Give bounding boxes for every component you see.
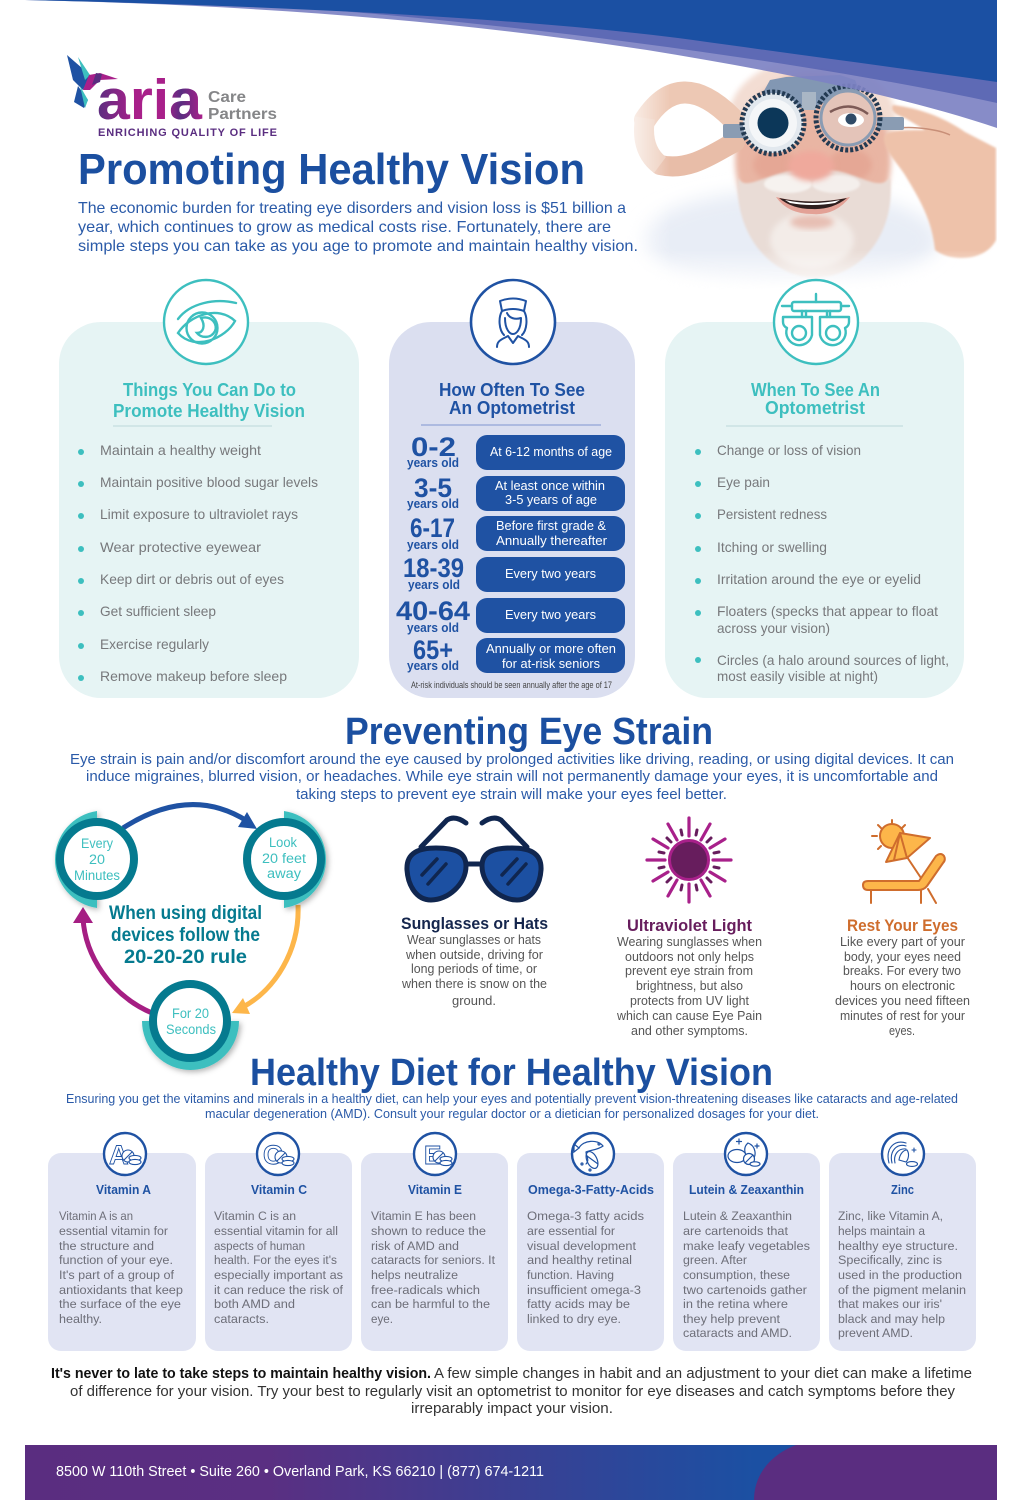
card: lutein and zeaxanthin <box>673 1133 820 1351</box>
bullet list: Circles (a halo around sources of light, <box>717 652 949 668</box>
card: vitamin A: Vitamin A <box>96 1183 151 1197</box>
bullet list: Exercise regularly <box>100 636 209 652</box>
card: omega-3: Omega-3-Fatty-Acids <box>528 1183 654 1197</box>
blue header swoosh <box>25 0 997 128</box>
body text: essential vitamin for all <box>214 1224 338 1238</box>
body text: Lutein & Zeaxanthin <box>683 1209 792 1223</box>
heading: preventing eye strain: Preventing Eye Strain <box>345 711 713 753</box>
icon: fish and capsule <box>572 1133 614 1175</box>
eye strain paragraph: induce migraines, blurred vision, or headaches. While eye strain will not permanently damage your eyes, it is uncomfortable and <box>86 769 938 785</box>
tip: ultraviolet light: which can cause Eye Pain <box>616 1009 762 1023</box>
rule text: devices follow the <box>111 925 260 946</box>
row: 3-5: 3-5 <box>414 473 452 503</box>
row: 18-39: Every two years <box>505 566 596 581</box>
tip: rest your eyes: devices you need fifteen <box>835 994 970 1008</box>
card: vitamin C: Vitamin C <box>251 1183 307 1197</box>
body text: fatty acids may be <box>527 1297 630 1311</box>
icon: lounge chair and umbrella <box>863 820 945 903</box>
bullet list: Persistent redness <box>717 506 827 522</box>
logo: Aria Care Partners: ENRICHING QUALITY OF LIFE <box>98 127 277 139</box>
tip: ultraviolet light: brightness, but also <box>636 979 743 993</box>
bullet list: Get sufficient sleep <box>100 603 216 619</box>
bullet list: Eye pain <box>717 474 770 490</box>
intro paragraph: year, which continues to grow as medical costs rise. Fortunately, there are <box>78 219 611 236</box>
tip: sunglasses or hats: Wear sunglasses or hats <box>407 933 541 947</box>
panel: things you can do <box>59 280 359 698</box>
body text: make leafy vegetables <box>683 1239 810 1253</box>
body text <box>527 1209 644 1326</box>
tip: rest your eyes: minutes of rest for your <box>840 1009 965 1023</box>
bullet list: Wear protective eyewear <box>100 539 261 555</box>
icon: vitamin C <box>257 1133 299 1175</box>
body text: Vitamin A is an <box>59 1209 133 1223</box>
body text: cataracts. <box>214 1312 269 1326</box>
icon: vitamin E <box>414 1133 456 1175</box>
diagram: 20-20-20 rule <box>55 805 326 1070</box>
body text <box>683 1209 810 1340</box>
tip: ultraviolet light: protects from UV light <box>630 994 750 1008</box>
row: 3-5: At least once within <box>495 478 605 493</box>
tip: ultraviolet light: prevent eye strain from <box>625 964 753 978</box>
bullet list: across your vision) <box>717 620 830 636</box>
tip: sunglasses or hats: when there is snow on the <box>401 977 547 991</box>
body text: aspects of human <box>214 1239 305 1253</box>
body text: risk of AMD and <box>371 1239 459 1253</box>
icon: sunglasses <box>407 818 541 900</box>
tip: rest your eyes: Rest Your Eyes <box>847 916 958 935</box>
body text: cataracts for seniors. It <box>371 1253 496 1267</box>
heading: An Optometrist <box>449 398 575 418</box>
body text: Vitamin E has been <box>371 1209 476 1223</box>
panel: how often to see an optometrist <box>389 280 635 698</box>
body text: It's part of a group of <box>59 1268 175 1282</box>
row: 0-2: years old <box>407 456 459 470</box>
body text: used in the production <box>838 1268 962 1282</box>
heading <box>751 380 880 418</box>
card: omega-3 <box>517 1133 664 1351</box>
icon: oyster and capsule <box>882 1133 924 1175</box>
body text: function of your eye. <box>59 1253 173 1267</box>
arrow: purple <box>73 907 152 1013</box>
body text: Zinc, like Vitamin A, <box>838 1209 943 1223</box>
body text: health. For the eyes it's <box>214 1253 337 1267</box>
row: 40-64: 40-64 <box>396 596 470 626</box>
intro paragraph <box>78 200 638 255</box>
rule text: When using digital <box>109 903 262 924</box>
heading <box>439 380 585 418</box>
bullet list: Maintain a healthy weight <box>100 442 261 458</box>
icon: optometrist <box>471 280 555 364</box>
row: 65+: years old <box>407 659 459 673</box>
eye strain paragraph <box>70 752 954 803</box>
row: 3-5: 3-5 years of age <box>505 492 597 507</box>
diet paragraph: macular degeneration (AMD). Consult your regular doctor or a dietician for personalized dosages for your diet. <box>205 1106 819 1121</box>
tip: sunglasses or hats: Sunglasses or Hats <box>401 914 548 933</box>
body text: green. After <box>683 1253 747 1267</box>
step: every 20 minutes: Every <box>81 836 113 851</box>
body text: they help prevent <box>683 1312 781 1326</box>
body text: healthy. <box>59 1312 102 1326</box>
body text <box>371 1209 496 1326</box>
closing statement: It's never to late to take steps to maintain healthy vision. <box>51 1366 431 1382</box>
bullet list: most easily visible at night) <box>717 668 878 684</box>
heading: Things You Can Do to <box>123 380 296 400</box>
row: 40-64 <box>396 596 625 635</box>
bullet list <box>78 442 318 684</box>
body text: prevent AMD. <box>838 1326 913 1340</box>
card: vitamin C <box>205 1133 352 1351</box>
step: for 20 seconds: For 20 <box>172 1006 209 1021</box>
body text: cataracts and AMD. <box>683 1326 792 1340</box>
icon: leaves and capsule <box>725 1133 767 1175</box>
step: for 20 seconds: Seconds <box>166 1022 216 1037</box>
body text <box>59 1209 183 1326</box>
bullet list: Irritation around the eye or eyelid <box>717 571 921 587</box>
row: 18-39: 18-39 <box>403 553 464 583</box>
body text: healthy eye structure. <box>838 1239 958 1253</box>
closing statement: of difference for your vision. Try your best to regularly visit an optometrist to monitor for eye diseases and catch symptoms before they <box>70 1384 956 1400</box>
tip: rest your eyes: eyes. <box>889 1024 915 1038</box>
body text: free-radicals which <box>371 1283 480 1297</box>
icon: trial frame <box>774 280 858 364</box>
step: every 20 minutes <box>55 811 134 908</box>
eye strain paragraph: taking steps to prevent eye strain will make your eyes feel better. <box>296 787 727 803</box>
tip: sunglasses or hats: when outside, driving for <box>405 948 543 962</box>
body text: and healthy retinal <box>527 1253 632 1267</box>
heading: Promote Healthy Vision <box>113 401 305 421</box>
row: 65+: for at-risk seniors <box>502 656 600 671</box>
card: vitamin E: Vitamin E <box>408 1183 462 1197</box>
body text: the structure and <box>59 1239 154 1253</box>
body text: black and may help <box>838 1312 945 1326</box>
bullet list: Floaters (specks that appear to float <box>717 603 938 619</box>
row: 18-39 <box>403 553 625 592</box>
body text: visual development <box>527 1239 637 1253</box>
logo: Aria Care Partners: Care <box>208 89 246 106</box>
footer bar <box>25 1445 997 1500</box>
diet paragraph <box>66 1091 958 1121</box>
step: for 20 seconds <box>142 984 239 1070</box>
bullet list: Remove makeup before sleep <box>100 668 287 684</box>
body text: eye. <box>371 1312 393 1326</box>
card: zinc <box>829 1133 976 1351</box>
body text: are essential for <box>527 1224 615 1238</box>
panel: when to see an optometrist <box>665 280 964 698</box>
row: 6-17: 6-17 <box>410 513 455 543</box>
step: look 20 feet away: 20 feet <box>262 851 306 866</box>
arrow: yellow <box>232 905 298 1014</box>
row: 40-64: Every two years <box>505 607 596 622</box>
tip: ultraviolet light: Ultraviolet Light <box>627 916 752 935</box>
rule text <box>109 903 262 968</box>
row: 6-17: years old <box>407 538 459 552</box>
tip: rest your eyes <box>835 820 970 1038</box>
closing statement: A few simple changes in habit and an adjustment to your diet can make a lifetime <box>434 1366 972 1382</box>
row: 0-2 <box>407 432 625 470</box>
bullet list: Change or loss of vision <box>717 442 861 458</box>
card: vitamin A <box>48 1133 196 1351</box>
body text: that makes our iris' <box>838 1297 942 1311</box>
intro paragraph: The economic burden for treating eye disorders and vision loss is $51 billion a <box>78 200 626 217</box>
tip: ultraviolet light: outdoors not only helps <box>625 950 754 964</box>
body text: can be harmful to the <box>371 1297 490 1311</box>
body text: Omega-3 fatty acids <box>527 1209 644 1223</box>
row: 65+ <box>407 635 625 673</box>
tip: rest your eyes: hours on electronic <box>850 979 955 993</box>
body text: consumption, these <box>683 1268 790 1282</box>
bullet list <box>695 442 949 684</box>
body text: both AMD and <box>214 1297 295 1311</box>
body text: in the retina where <box>683 1297 788 1311</box>
body text: are cartenoids that <box>683 1224 789 1238</box>
logo: Aria Care Partners <box>67 55 277 139</box>
tip: sunglasses or hats: ground. <box>452 994 496 1008</box>
closing statement <box>51 1366 972 1417</box>
bullet list: Maintain positive blood sugar levels <box>100 474 318 490</box>
body text <box>838 1209 966 1340</box>
footnote: At-risk individuals should be seen annually after the age of 17 <box>411 680 612 690</box>
step: look 20 feet away: away <box>267 866 301 881</box>
tip: ultraviolet light <box>616 818 762 1038</box>
diet paragraph: Ensuring you get the vitamins and minerals in a healthy diet, can help your eyes and potentially prevent vision-threatening diseases like cataracts and age-related <box>66 1091 958 1106</box>
row: 3-5: years old <box>407 497 459 511</box>
heading: When To See An <box>751 380 880 400</box>
body text: linked to dry eye. <box>527 1312 621 1326</box>
body text: insufficient omega-3 <box>527 1283 641 1297</box>
icon: vitamin A <box>104 1133 146 1175</box>
tip: rest your eyes: breaks. For every two <box>843 964 961 978</box>
step: look 20 feet away <box>247 811 326 908</box>
icon: vitamin E: E <box>424 1140 441 1170</box>
card: lutein and zeaxanthin: Lutein & Zeaxanthin <box>689 1183 804 1197</box>
body text: Specifically, zinc is <box>838 1253 942 1267</box>
body text: especially important as <box>214 1268 343 1282</box>
heading: healthy diet: Healthy Diet for Healthy Vision <box>250 1052 773 1094</box>
body text: helps neutralize <box>371 1268 458 1282</box>
body text: shown to reduce the <box>371 1224 486 1238</box>
row: 6-17: Annually thereafter <box>496 533 608 548</box>
row: 0-2: At 6-12 months of age <box>490 444 612 459</box>
photo: older man with trial frame glasses <box>640 58 996 290</box>
tip: sunglasses or hats: long periods of time, or <box>411 962 537 976</box>
body text: helps maintain a <box>838 1224 925 1238</box>
body text: the surface of the eye <box>59 1297 181 1311</box>
body text: function. Having <box>527 1268 614 1282</box>
tip: ultraviolet light: and other symptoms. <box>631 1024 748 1038</box>
bullet list: Keep dirt or debris out of eyes <box>100 571 284 587</box>
row: 6-17 <box>407 513 625 552</box>
icon: eye <box>164 280 248 364</box>
tip: sunglasses or hats <box>401 818 548 1008</box>
card: zinc: Zinc <box>891 1183 914 1197</box>
intro paragraph: simple steps you can take as you age to promote and maintain healthy vision. <box>78 238 638 255</box>
icon: vitamin C: C <box>263 1140 282 1170</box>
title: Promoting Healthy Vision <box>78 145 585 194</box>
row: 3-5 <box>407 473 625 511</box>
tip: rest your eyes: Like every part of your <box>840 935 965 949</box>
row: 65+: 65+ <box>413 635 453 665</box>
logo: Aria Care Partners: Partners <box>208 106 277 123</box>
card: vitamin E <box>361 1133 508 1351</box>
step: every 20 minutes: Minutes <box>74 868 120 883</box>
eye strain paragraph: Eye strain is pain and/or discomfort around the eye caused by prolonged activities like driving, reading, or using digital devices. It can <box>70 752 954 768</box>
tip: rest your eyes: body, your eyes need <box>844 950 961 964</box>
step: every 20 minutes: 20 <box>89 852 105 867</box>
rule text: 20-20-20 rule <box>124 947 247 968</box>
footer bar: 8500 W 110th Street • Suite 260 • Overland Park, KS 66210 | (877) 674-1211 <box>56 1464 544 1480</box>
row: 6-17: Before first grade & <box>496 518 606 533</box>
step: look 20 feet away: Look <box>269 835 297 850</box>
row: 18-39: years old <box>408 578 460 592</box>
row: 40-64: years old <box>407 621 459 635</box>
arrow: blue <box>123 805 257 829</box>
icon: sun <box>647 818 731 902</box>
icon: hummingbird <box>67 55 118 108</box>
body text <box>214 1209 344 1326</box>
row: 0-2: 0-2 <box>411 432 456 462</box>
body text: it can reduce the risk of <box>214 1283 344 1297</box>
body text: of the pigment melanin <box>838 1283 966 1297</box>
closing statement: irreparably impact your vision. <box>411 1401 613 1417</box>
row: 65+: Annually or more often <box>486 641 616 656</box>
body text: antioxidants that keep <box>59 1283 183 1297</box>
icon: vitamin A: A <box>109 1140 128 1170</box>
heading <box>113 380 305 421</box>
heading: Optometrist <box>765 398 865 418</box>
bullet list: Itching or swelling <box>717 539 827 555</box>
body text: two cartenoids gather <box>683 1283 807 1297</box>
bullet list: Limit exposure to ultraviolet rays <box>100 506 298 522</box>
body text: Vitamin C is an <box>214 1209 296 1223</box>
logo: Aria Care Partners: aria <box>97 68 203 132</box>
tip: ultraviolet light: Wearing sunglasses when <box>617 935 762 949</box>
heading: How Often To See <box>439 380 585 400</box>
body text: essential vitamin for <box>59 1224 168 1238</box>
